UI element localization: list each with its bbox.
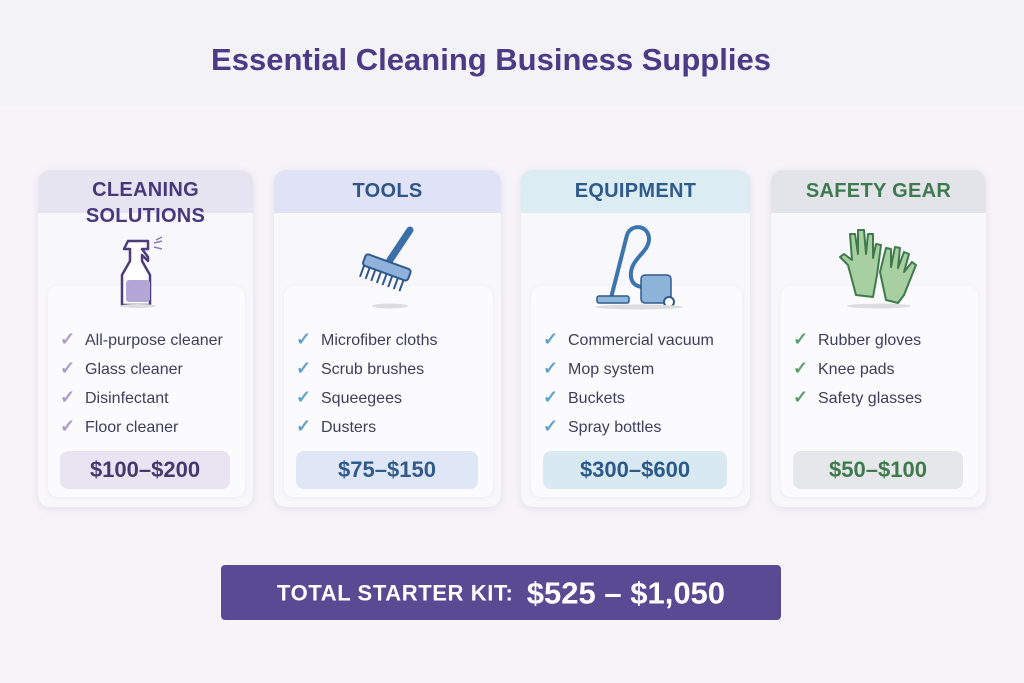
icon: vacuum [595, 225, 683, 310]
list: cleaning solutions items: All-purpose cleaner [85, 332, 223, 349]
icon: scrub brush [359, 226, 414, 308]
list: safety gear items: Safety glasses [818, 390, 922, 407]
list: safety gear items [793, 329, 922, 407]
price: equipment: $300–$600 [580, 457, 690, 482]
list: cleaning solutions items: Disinfectant [85, 390, 169, 407]
list: cleaning solutions items [60, 329, 223, 436]
list: cleaning solutions items: ✓ [60, 387, 75, 407]
panel: equipment [521, 170, 750, 507]
heading: cleaning solutions [38, 170, 253, 213]
list: equipment items: ✓ [543, 387, 558, 407]
heading: tools [274, 170, 501, 213]
list: equipment items: ✓ [543, 416, 558, 436]
price: tools: $75–$150 [338, 457, 436, 482]
list: tools items: Scrub brushes [321, 361, 424, 378]
list: cleaning solutions items: Floor cleaner [85, 419, 178, 436]
price: equipment [543, 451, 727, 489]
list: cleaning solutions items: ✓ [60, 416, 75, 436]
heading: equipment [521, 170, 750, 213]
list: equipment items: Buckets [568, 390, 625, 407]
list: equipment items [543, 329, 714, 436]
icon: spray bottle [120, 236, 162, 308]
list: tools items: ✓ [296, 358, 311, 378]
price: cleaning solutions: $100–$200 [90, 457, 200, 482]
heading: equipment: EQUIPMENT [575, 180, 696, 202]
list: equipment items: Mop system [568, 361, 654, 378]
list: tools items [296, 329, 437, 436]
list: safety gear items: Knee pads [818, 361, 895, 378]
list: equipment items: ✓ [543, 329, 558, 349]
panel: safety gear [771, 170, 986, 507]
list: tools items: ✓ [296, 416, 311, 436]
price: tools [296, 451, 478, 489]
list: safety gear items: ✓ [793, 387, 808, 407]
list: cleaning solutions items: Glass cleaner [85, 361, 183, 378]
list: equipment items: ✓ [543, 358, 558, 378]
icon: gloves [839, 229, 917, 308]
list: tools items: Microfiber cloths [321, 332, 437, 349]
panel: cleaning solutions [38, 170, 253, 507]
heading: cleaning solutions: CLEANING [92, 179, 199, 201]
list: tools items: ✓ [296, 387, 311, 407]
list: tools items: Dusters [321, 419, 376, 436]
price: safety gear: $50–$100 [829, 457, 927, 482]
price: cleaning solutions [60, 451, 230, 489]
list: equipment items: Commercial vacuum [568, 332, 714, 349]
total banner: TOTAL STARTER KIT: $525 – $1,050 [277, 575, 725, 610]
panel: cleaning solutions: SOLUTIONS [86, 205, 205, 227]
heading: safety gear [771, 170, 986, 213]
list: cleaning solutions items: ✓ [60, 358, 75, 378]
heading: tools: TOOLS [352, 180, 423, 202]
list: safety gear items: ✓ [793, 358, 808, 378]
total banner [221, 565, 781, 620]
title: Essential Cleaning Business Supplies [211, 42, 771, 77]
list: safety gear items: Rubber gloves [818, 332, 921, 349]
list: tools items: ✓ [296, 329, 311, 349]
price: safety gear [793, 451, 963, 489]
list: cleaning solutions items: ✓ [60, 329, 75, 349]
heading: safety gear: SAFETY GEAR [806, 180, 951, 202]
list: tools items: Squeegees [321, 390, 402, 407]
list: equipment items: Spray bottles [568, 419, 661, 436]
list: safety gear items: ✓ [793, 329, 808, 349]
panel: tools [274, 170, 501, 507]
